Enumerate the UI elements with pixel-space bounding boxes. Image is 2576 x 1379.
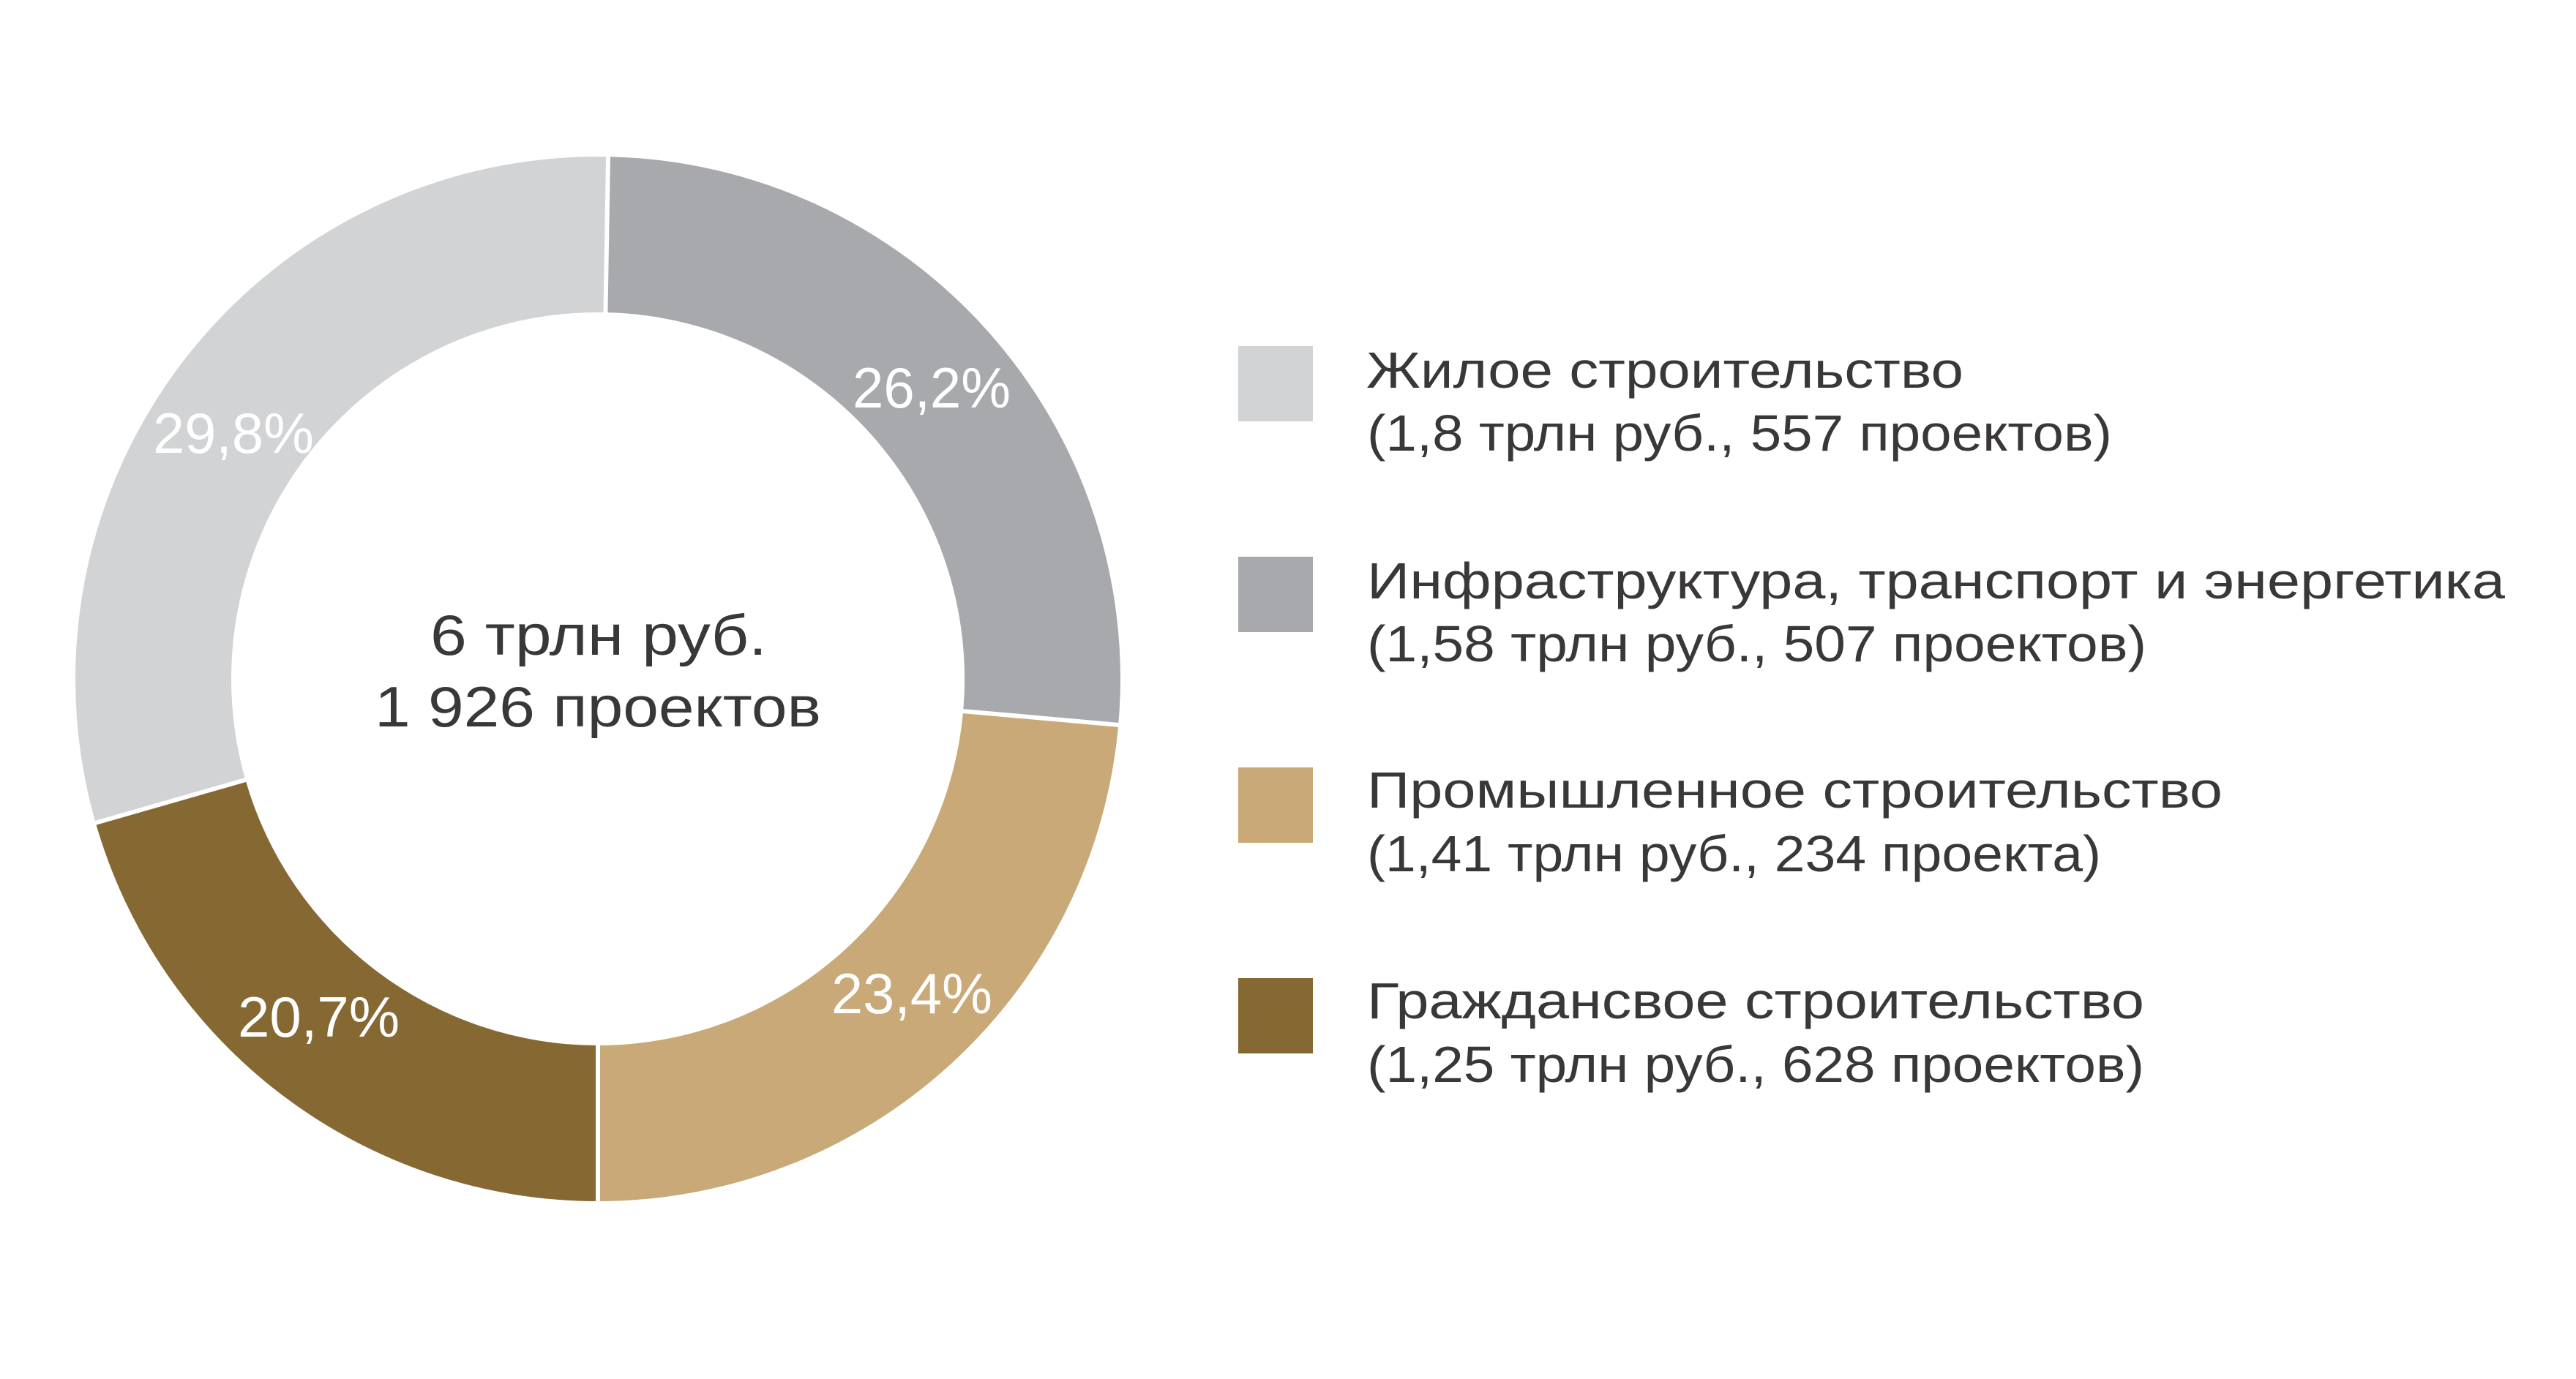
segment: residential 29.8% (75, 157, 608, 823)
segment: industrial 23.4% (598, 711, 1118, 1201)
center total text: 1 926 проектов (375, 675, 821, 739)
legend item: civil: (1,25 трлн руб., 628 проектов) (1367, 1036, 2144, 1093)
legend item: infrastructure (1238, 552, 2505, 672)
legend item: infrastructure: Инфраструктура, транспорт и энергетика (1367, 552, 2505, 609)
donut chart (75, 154, 1121, 1204)
label: 23,4%: 23,4% (831, 961, 992, 1026)
segment: civil 20.7% (96, 780, 598, 1201)
legend item: civil (1238, 972, 2144, 1093)
legend item: industrial: (1,41 трлн руб., 234 проекта) (1367, 825, 2101, 882)
legend item: infrastructure: (1,58 трлн руб., 507 проектов) (1367, 615, 2146, 672)
segment: infrastructure 26.2% (606, 157, 1120, 725)
legend item: industrial: Промышленное строительство (1367, 762, 2223, 819)
label: 20,7%: 20,7% (238, 985, 400, 1049)
legend item: residential: (1,8 трлн руб., 557 проектов) (1367, 405, 2112, 462)
center total text (375, 603, 821, 739)
legend item: residential (1238, 342, 2112, 462)
center total text: 6 трлн руб. (430, 603, 767, 667)
legend item: civil: Граждансвое строительство (1367, 972, 2144, 1029)
label: 29,8%: 29,8% (153, 401, 314, 465)
legend item: residential: Жилое строительство (1366, 342, 1963, 399)
label: 26,2%: 26,2% (853, 356, 1011, 420)
legend (1238, 342, 2505, 1093)
legend item: industrial (1238, 762, 2223, 882)
